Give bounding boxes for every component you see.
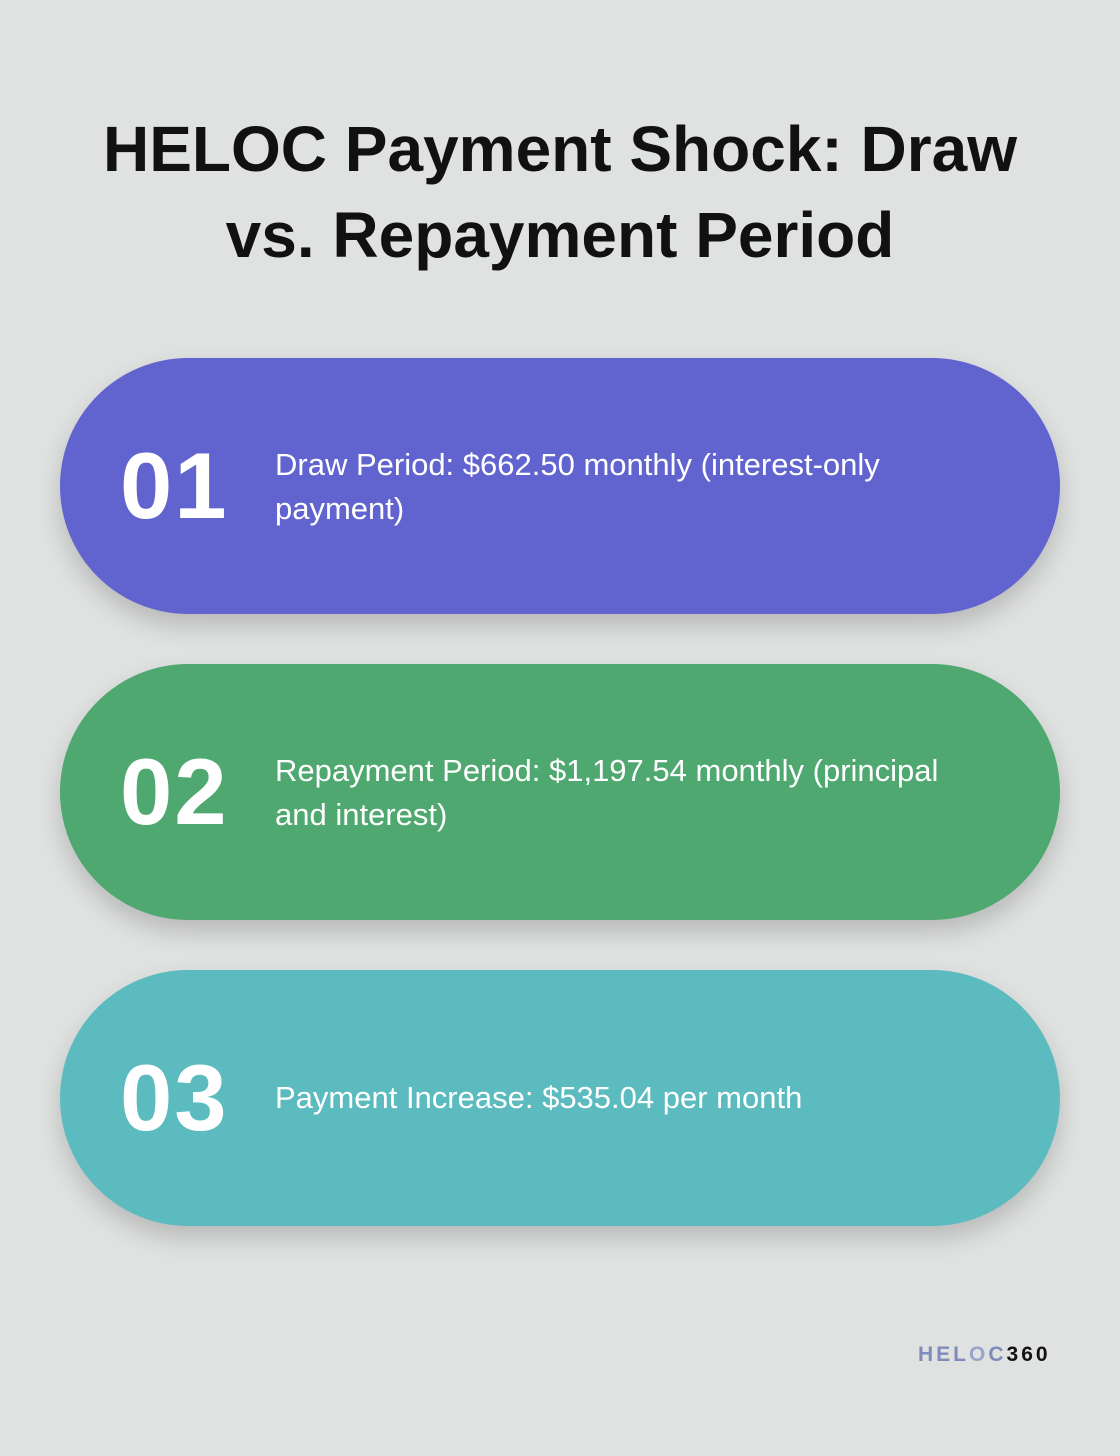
text: repayment period: Repayment Period: $1,197.54 monthly (principal and interest): [275, 753, 938, 832]
logo: HELOC360: [918, 1343, 1051, 1366]
number 02: 02: [120, 739, 229, 844]
panel: repayment period: [60, 664, 1060, 920]
title: [103, 113, 1018, 271]
number 03: 03: [120, 1045, 229, 1150]
text: payment increase: Payment Increase: $535.04 per month: [275, 1080, 802, 1115]
panel: draw period: [60, 358, 1060, 614]
text: draw period: Draw Period: $662.50 monthly (interest-only payment): [275, 447, 880, 526]
title: vs. Repayment Period: [226, 199, 894, 271]
number 01: 01: [120, 433, 229, 538]
title: HELOC Payment Shock: Draw: [103, 113, 1017, 185]
panel: payment increase: [60, 970, 1060, 1226]
